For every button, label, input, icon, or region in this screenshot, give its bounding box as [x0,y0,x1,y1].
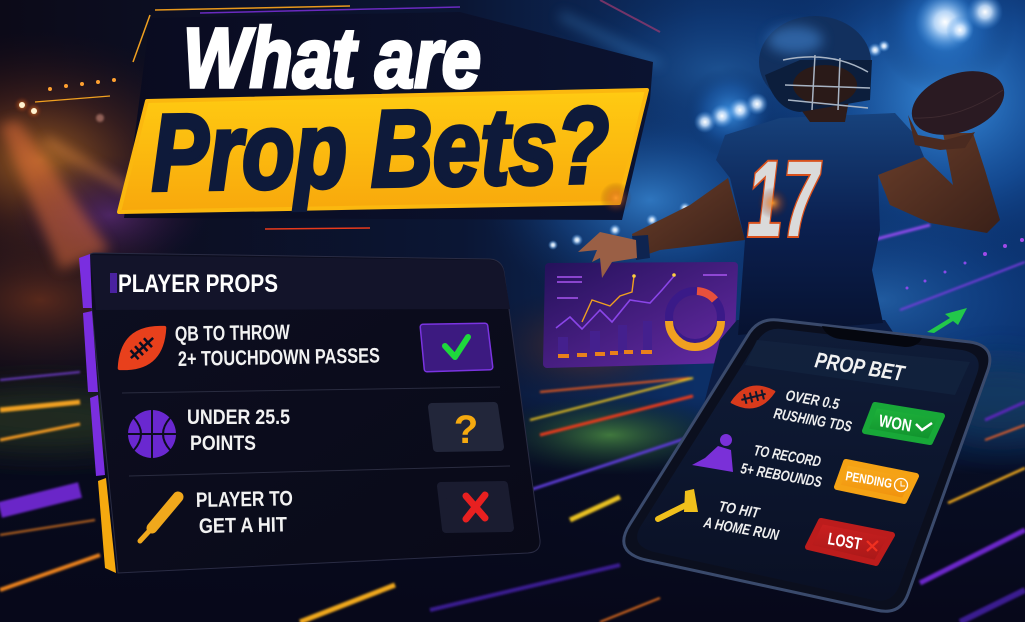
status: lost [808,521,892,563]
bet row 3 [658,489,892,563]
status: check [423,326,490,369]
title banner [35,6,653,229]
player legs [700,320,905,420]
phone [624,320,990,611]
icon: player [692,434,733,472]
side accent strips [79,254,116,573]
line chart [556,273,676,329]
status: won [865,405,942,442]
bet row 3: TO HIT [717,498,762,522]
bar chart [558,321,652,356]
phone notch [822,326,922,347]
bet row 1: OVER 0.5 [784,387,841,413]
football [903,59,1013,147]
helmet [759,16,872,112]
bet row 2: TO RECORD [752,442,822,471]
row 1: football prop: 2+ TOUCHDOWN PASSES [178,344,380,371]
player left arm [578,178,745,278]
player [578,16,1013,420]
icon: basketball [128,410,176,458]
status: pending: PENDING [844,468,893,491]
phone header band [745,340,970,395]
banner: yellow plate [119,90,647,212]
hand [578,232,637,278]
row 2: basketball prop: POINTS [190,432,256,455]
banner: dark upper plate [124,12,653,220]
bet row 2: 5+ REBOUNDS [739,460,823,491]
phone body [624,320,990,611]
status: pending [837,462,916,501]
jersey glow [757,187,789,219]
status: won: WON [877,411,913,436]
icon: green arrow [927,308,967,333]
row 2: basketball prop: UNDER 25.5 [187,406,290,429]
player neck [790,95,850,122]
row 1: football prop [110,317,490,379]
chart card [547,266,734,364]
phone screen [637,329,979,601]
donut chart [669,291,721,347]
banner accent lines [35,6,460,229]
status: lost: LOST [826,529,864,554]
row 1: football prop: QB TO THROW [175,321,290,346]
bet row 3: A HOME RUN [702,514,781,544]
bet row 2 [692,434,916,501]
player throwing arm [877,133,1000,233]
panel: player props [79,253,540,573]
wristband [632,235,650,260]
throwing hand [908,115,975,150]
player jersey [716,113,924,335]
heading: What are: What are [183,11,481,105]
bet row 1: RUSHING TDS [772,405,853,436]
phone heading: PROP BET [813,347,907,386]
panel background [87,253,540,573]
banner flare [600,182,632,214]
row 3: baseball prop [140,485,510,541]
chart legend ticks [557,275,727,298]
status: cross [441,485,510,529]
status: question [432,406,500,452]
panel header band [90,255,510,310]
icon: bat [140,497,178,541]
row 3: baseball prop: GET A HIT [199,513,287,538]
panel heading: PLAYER PROPS [118,270,278,298]
icon: football [729,382,777,412]
jersey number: 17 [747,138,822,259]
bet row 1 [729,382,942,442]
icon: football [110,317,174,379]
icon: bat [658,489,698,519]
stadium lights [13,0,1024,290]
row 2: basketball prop [128,406,500,458]
heading: Prop Bets?: Prop Bets? [150,84,610,213]
status: question: ? [454,408,478,452]
row 3: baseball prop: PLAYER TO [196,487,293,512]
